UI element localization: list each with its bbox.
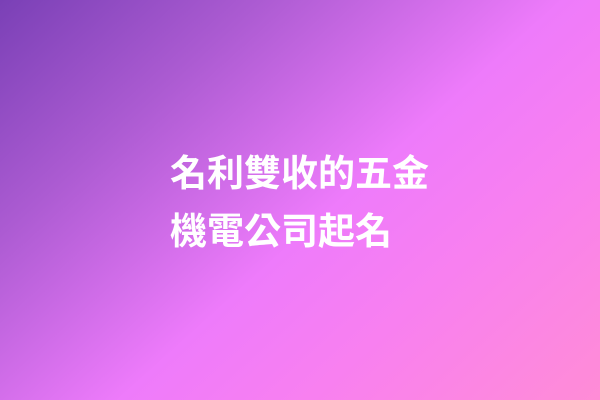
- title: 機電公司起名: [170, 211, 392, 252]
- title: 名利雙收的五金: [170, 153, 429, 194]
- title: [170, 153, 429, 252]
